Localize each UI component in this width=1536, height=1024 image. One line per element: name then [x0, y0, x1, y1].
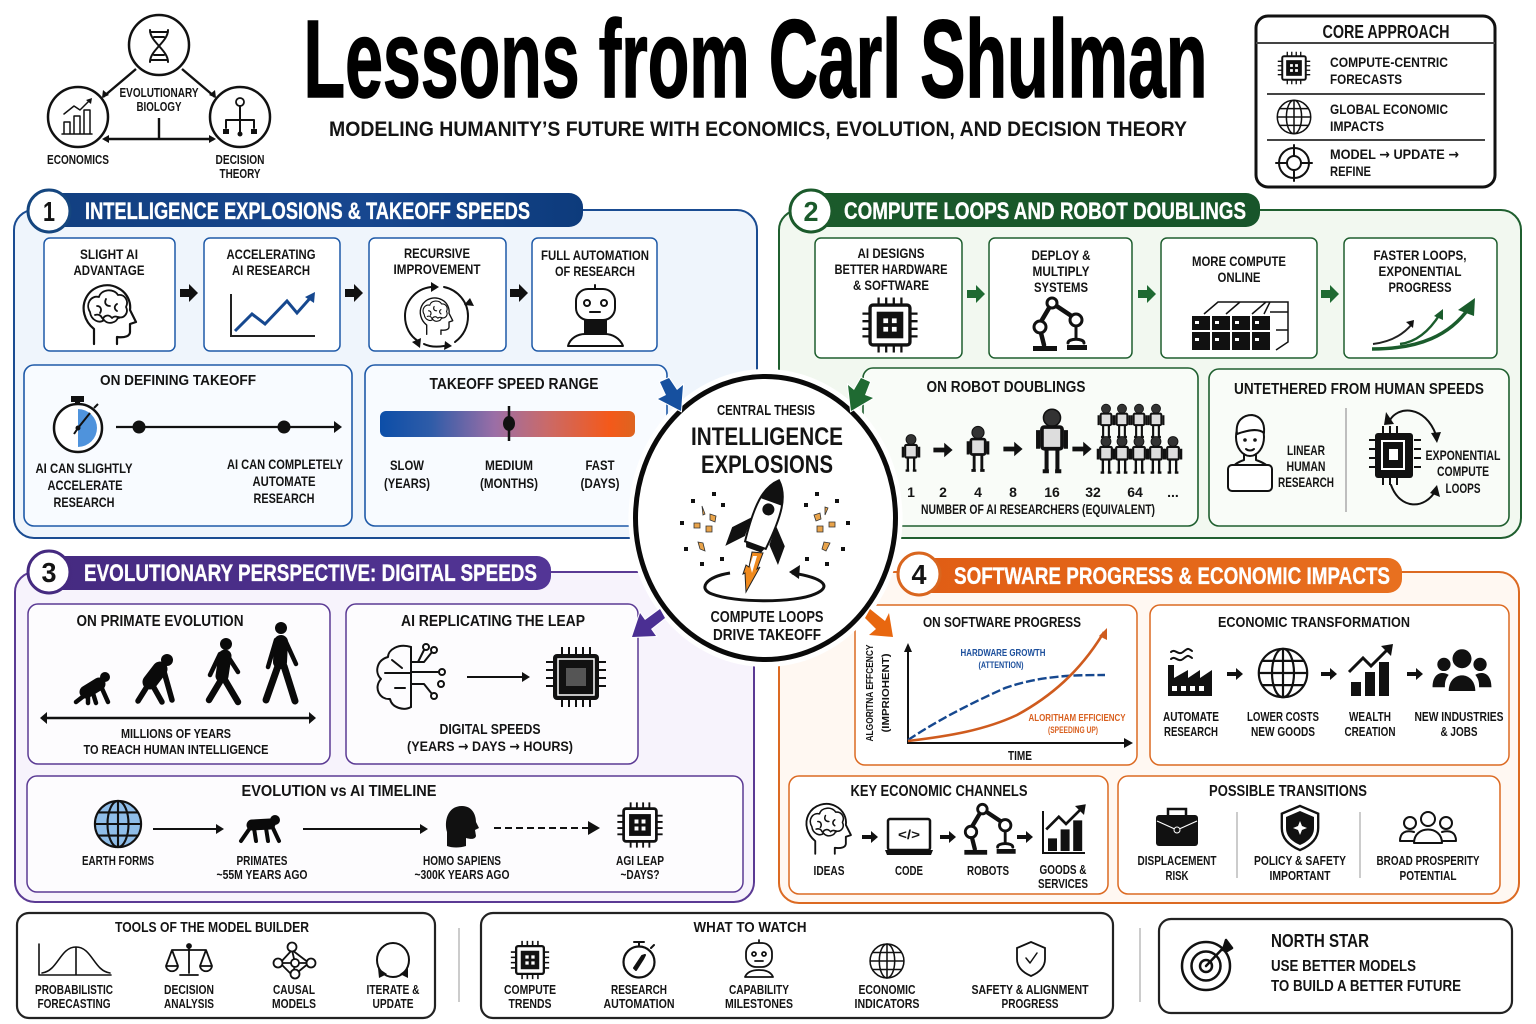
primate silhouettes	[76, 622, 296, 703]
label: new industries	[1414, 709, 1504, 739]
text: central thesis: CENTRAL THESIS	[717, 402, 815, 419]
panel: tools of the model builder	[17, 913, 435, 1018]
card: full automation of research: OF RESEARCH	[555, 263, 635, 279]
label: decision analysis: ANALYSIS	[164, 996, 214, 1011]
label: evolutionary biology	[120, 85, 199, 114]
icon: people	[1433, 649, 1491, 691]
gradient speed bar	[380, 406, 635, 441]
label: new industries: NEW INDUSTRIES	[1414, 709, 1504, 724]
text: compute-centric: COMPUTE-CENTRIC	[1330, 54, 1448, 70]
doubling numbers: ...	[1167, 484, 1179, 500]
icon: stopwatch	[624, 942, 654, 978]
center: central thesis circle	[628, 369, 902, 667]
panel: takeoff speed range	[365, 365, 667, 526]
panel: section 3 evolutionary perspective	[15, 551, 754, 902]
card: recursive improvement: RECURSIVE	[404, 245, 470, 261]
text: model update refine: MODEL → UPDATE →	[1330, 146, 1459, 163]
arrow	[1407, 668, 1423, 680]
label: probabilistic forecasting	[35, 982, 113, 1011]
label: displacement risk: DISPLACEMENT	[1138, 853, 1217, 868]
icon: orbit loop arrow	[705, 565, 824, 601]
icon: economics chart circle	[48, 87, 108, 147]
icon: scales	[166, 944, 212, 975]
text: compute-centric	[1330, 54, 1448, 87]
label: compute trends: TRENDS	[508, 996, 552, 1011]
panel: on software progress	[855, 605, 1137, 765]
text: digital speeds	[407, 721, 573, 755]
section 1 banner: 1	[43, 196, 55, 227]
label: policy and safety	[1254, 853, 1346, 883]
label: safety and alignment: PROGRESS	[1002, 996, 1059, 1011]
robots doubling	[903, 404, 1181, 473]
arrow	[1017, 831, 1033, 843]
text: AI can completely automate research	[227, 456, 344, 506]
doubling numbers: 8	[1009, 484, 1017, 500]
heading: AI REPLICATING THE LEAP	[401, 613, 585, 630]
text: AI can completely automate research: AUTOMATE	[252, 473, 316, 489]
doubling numbers: 1	[907, 484, 915, 500]
panel: north star	[1159, 919, 1512, 1013]
card: deploy and multiply	[989, 238, 1132, 358]
section 2 banner: COMPUTE LOOPS AND ROBOT DOUBLINGS	[844, 198, 1246, 225]
label: lower costs: NEW GOODS	[1251, 724, 1315, 739]
label: broad prosperity: POTENTIAL	[1400, 868, 1457, 883]
label: fast	[580, 457, 620, 491]
panel: on robot doublings	[863, 368, 1198, 526]
label: causal models: CAUSAL	[273, 982, 315, 997]
label: decision theory: DECISION	[216, 152, 264, 167]
heading: core approach: CORE APPROACH	[1322, 22, 1450, 42]
label: decision analysis: DECISION	[164, 982, 214, 997]
text: model update refine: REFINE	[1330, 163, 1371, 179]
timeline: takeoff	[116, 420, 342, 434]
card: slight AI advantage: SLIGHT AI	[80, 246, 138, 262]
label: research automation: AUTOMATION	[604, 996, 674, 1011]
label: displacement risk: RISK	[1166, 868, 1189, 883]
text: AI can slightly accelerate research: RESEARCH	[54, 494, 114, 510]
text: exponential compute loops	[1426, 447, 1501, 496]
section 3 banner: EVOLUTIONARY PERSPECTIVE: DIGITAL SPEEDS	[84, 560, 537, 587]
doubling numbers: 16	[1044, 484, 1060, 500]
icon: globe	[870, 944, 904, 978]
arrow	[180, 284, 198, 302]
text: better models: TO BUILD A BETTER FUTURE	[1271, 978, 1461, 995]
label: economic indicators: INDICATORS	[854, 996, 920, 1011]
text: intelligence explosions	[691, 423, 843, 479]
text: exponential compute loops: COMPUTE	[1437, 463, 1489, 479]
card: deploy and multiply: DEPLOY &	[1032, 247, 1090, 263]
label: lower costs: LOWER COSTS	[1247, 709, 1319, 724]
label: primates	[216, 853, 308, 882]
label: iterate and update	[366, 982, 420, 1011]
text: exponential compute loops: EXPONENTIAL	[1426, 447, 1501, 463]
label: slow: (YEARS)	[384, 475, 430, 491]
icon: briefcase	[1156, 809, 1198, 846]
label: goods and services: GOODS &	[1040, 862, 1086, 877]
card: faster loops: PROGRESS	[1388, 279, 1452, 295]
label: broad prosperity	[1376, 853, 1480, 883]
arrow	[153, 824, 224, 834]
arrow	[1321, 285, 1339, 303]
panel: section 1 intelligence explosions	[14, 190, 757, 538]
label: AGI leap: AGI LEAP	[616, 853, 664, 868]
icon: AGI chip	[617, 802, 663, 848]
card: recursive improvement	[369, 238, 506, 351]
label: lower costs	[1247, 709, 1319, 739]
label: probabilistic forecasting: PROBABILISTIC	[35, 982, 113, 997]
arrow	[345, 284, 363, 302]
text: AI can completely automate research: RESEARCH	[254, 490, 314, 506]
text: AI can completely automate research: AI CAN COMPLETELY	[227, 456, 344, 472]
heading: ECONOMIC TRANSFORMATION	[1218, 614, 1410, 631]
label: research automation	[604, 982, 674, 1011]
icon: primate	[241, 815, 280, 841]
arrow	[1138, 285, 1156, 303]
text: better models	[1271, 958, 1461, 995]
text: model update refine	[1330, 146, 1459, 179]
panel: on primate evolution	[28, 604, 330, 764]
icon: robot arm	[964, 804, 1016, 855]
label: homo sapiens: HOMO SAPIENS	[423, 853, 501, 868]
label: automate research: AUTOMATE	[1163, 709, 1219, 724]
label: safety and alignment: SAFETY & ALIGNMENT	[972, 982, 1089, 997]
heading: ON PRIMATE EVOLUTION	[76, 613, 244, 630]
label: capability milestones: CAPABILITY	[729, 982, 789, 997]
section 1 banner: INTELLIGENCE EXPLOSIONS & TAKEOFF SPEEDS	[85, 198, 530, 225]
axis label: NUMBER OF AI RESEARCHERS (EQUIVALENT)	[921, 501, 1155, 517]
label: safety and alignment	[972, 982, 1089, 1011]
panel: core approach	[1256, 16, 1495, 187]
text: compute-centric: FORECASTS	[1330, 71, 1402, 87]
arrow	[510, 284, 528, 302]
card: accelerating AI research: AI RESEARCH	[232, 262, 310, 278]
label: algorithm efficiency: (SPEEDING UP)	[1048, 725, 1098, 735]
card: AI designs better hardware: AI DESIGNS	[858, 245, 924, 261]
label: economics: ECONOMICS	[47, 152, 109, 167]
label: decision theory: THEORY	[220, 166, 261, 181]
panel: what to watch	[481, 913, 1113, 1018]
arrow	[940, 831, 956, 843]
card: faster loops	[1344, 238, 1497, 358]
icon: chip with loop arrows	[1369, 411, 1441, 504]
arrow: purple into center	[632, 609, 665, 637]
card: slight AI advantage: ADVANTAGE	[74, 262, 144, 278]
doubling numbers: 2	[939, 484, 947, 500]
label: wealth creation: WEALTH	[1349, 709, 1391, 724]
icon: target with arrow	[1182, 940, 1232, 990]
card: slight AI advantage	[44, 238, 175, 351]
label: research automation: RESEARCH	[611, 982, 667, 997]
rotated axis label: (IMPRIOHENT)	[880, 654, 892, 732]
doubling numbers: 64	[1127, 484, 1143, 500]
heading: ON DEFINING TAKEOFF	[100, 372, 256, 389]
section 3 banner	[28, 551, 551, 593]
label: AGI leap	[616, 853, 664, 882]
panel: possible transitions	[1118, 776, 1500, 894]
heading: north star: NORTH STAR	[1271, 931, 1369, 951]
text: intelligence explosions: INTELLIGENCE	[691, 423, 843, 451]
label: robots: ROBOTS	[967, 863, 1009, 878]
icon: chip	[1278, 52, 1310, 84]
label: ideas: IDEAS	[814, 863, 845, 878]
icon: brain circuit	[377, 644, 445, 709]
icon: stopwatch	[54, 396, 102, 452]
label: economic indicators	[854, 982, 920, 1011]
section 3 banner: 3	[42, 557, 56, 588]
header: discipline triad	[47, 15, 270, 181]
heading: KEY ECONOMIC CHANNELS	[850, 783, 1028, 800]
text: global economic impacts: GLOBAL ECONOMIC	[1330, 101, 1448, 117]
label: homo sapiens	[414, 853, 510, 882]
icon: laptop code	[885, 819, 933, 855]
heading: EVOLUTION vs AI TIMELINE	[242, 783, 437, 800]
text: AI can slightly accelerate research	[36, 460, 133, 510]
icon: laptop code: </>	[898, 827, 920, 842]
panel: section 4 software progress	[779, 553, 1519, 903]
card: faster loops: EXPONENTIAL	[1378, 263, 1462, 279]
label: time: TIME	[1008, 748, 1032, 763]
section 4 banner: 4	[912, 559, 927, 590]
arrow	[303, 824, 428, 834]
label: medium: MEDIUM	[485, 457, 533, 473]
label: automate research: RESEARCH	[1164, 724, 1218, 739]
text: compute loops drive takeoff: DRIVE TAKEOFF	[713, 627, 821, 644]
label: goods and services: SERVICES	[1038, 876, 1088, 891]
label: decision theory	[216, 152, 264, 181]
icon: bell curve	[39, 944, 111, 975]
heading: ON SOFTWARE PROGRESS	[923, 614, 1081, 631]
panel: evolution vs AI timeline	[27, 776, 743, 892]
text: AI can slightly accelerate research: AI CAN SLIGHTLY	[36, 460, 133, 476]
label: fast: FAST	[586, 457, 615, 473]
doubling numbers	[907, 484, 1179, 500]
card: faster loops: FASTER LOOPS,	[1374, 247, 1466, 263]
label: hardware growth: (ATTENTION)	[978, 660, 1024, 670]
text: compute loops drive takeoff	[710, 609, 824, 644]
label: evolutionary biology: EVOLUTIONARY	[120, 85, 199, 100]
card: AI designs better hardware: & SOFTWARE	[853, 277, 929, 293]
label: policy and safety: POLICY & SAFETY	[1254, 853, 1346, 868]
text: linear human research: RESEARCH	[1278, 474, 1334, 490]
icon: factory	[1168, 649, 1212, 696]
card: recursive improvement: IMPROVEMENT	[394, 261, 481, 277]
label: iterate and update: UPDATE	[372, 996, 414, 1011]
arrow	[967, 285, 985, 303]
icon: earth	[95, 801, 141, 847]
label: earth forms: EARTH FORMS	[82, 853, 154, 868]
icon: globe	[1277, 100, 1311, 134]
panel: AI replicating the leap	[346, 604, 638, 764]
label: policy and safety: IMPORTANT	[1270, 868, 1331, 883]
heading: ON ROBOT DOUBLINGS	[926, 379, 1086, 396]
label: primates: ~55M YEARS AGO	[216, 867, 308, 882]
icon: decision tree circle	[210, 87, 270, 147]
text: millions of years: TO REACH HUMAN INTELLIGENCE	[84, 742, 269, 757]
label: economic indicators: ECONOMIC	[858, 982, 916, 997]
label: displacement risk	[1138, 853, 1217, 883]
card: full automation of research: FULL AUTOMATION	[541, 247, 649, 263]
card: accelerating AI research	[204, 238, 340, 351]
card: accelerating AI research: ACCELERATING	[226, 246, 316, 262]
icon: causal graph	[274, 942, 316, 978]
label: causal models: MODELS	[272, 996, 316, 1011]
panel: economic transformation	[1150, 605, 1509, 765]
icon: black chip	[546, 647, 606, 707]
doubling numbers: 4	[974, 484, 982, 500]
label: evolutionary biology: BIOLOGY	[136, 99, 182, 114]
icon: safety shield	[1282, 806, 1318, 850]
label: wealth creation: CREATION	[1344, 724, 1396, 739]
section 2 banner	[790, 190, 1260, 232]
card: more compute online: ONLINE	[1218, 269, 1260, 285]
text: compute loops drive takeoff: COMPUTE LOOPS	[710, 609, 824, 626]
section 1 banner	[28, 190, 583, 232]
arrow	[467, 672, 530, 682]
panel: key economic channels	[789, 776, 1108, 894]
label: slow: SLOW	[390, 457, 425, 473]
icon: people outline	[1400, 812, 1456, 843]
icon: human head	[446, 806, 479, 848]
icon: human at laptop	[1228, 415, 1272, 491]
heading: WHAT TO WATCH	[694, 919, 806, 936]
label: broad prosperity: BROAD PROSPERITY	[1376, 853, 1480, 868]
label: hardware growth: HARDWARE GROWTH	[960, 647, 1046, 659]
panel: on defining takeoff	[24, 365, 352, 526]
label: compute trends	[504, 982, 556, 1011]
icon: robot head	[745, 940, 773, 977]
label: homo sapiens: ~300K YEARS AGO	[414, 867, 510, 882]
text: linear human research: HUMAN	[1286, 458, 1326, 474]
label: new industries: & JOBS	[1440, 724, 1478, 739]
label: automate research	[1163, 709, 1219, 739]
arrow: orange into center	[865, 609, 893, 637]
label: wealth creation	[1344, 709, 1396, 739]
card: AI designs better hardware	[815, 238, 962, 358]
rotated axis label	[864, 644, 892, 742]
card: full automation of research	[532, 238, 657, 351]
icon: goods chart	[1043, 804, 1086, 853]
label: AGI leap: ~DAYS?	[620, 867, 660, 882]
icon: idea head	[806, 804, 851, 854]
text: linear human research: LINEAR	[1287, 442, 1325, 458]
text: better models: USE BETTER MODELS	[1271, 958, 1416, 975]
label: compute trends: COMPUTE	[504, 982, 556, 997]
doubling numbers: 32	[1085, 484, 1101, 500]
dashed arrow	[494, 821, 600, 835]
line chart	[904, 628, 1133, 748]
icon: DNA in evolutionary biology circle	[129, 15, 189, 75]
label: capability milestones: MILESTONES	[725, 996, 793, 1011]
label: decision analysis	[164, 982, 214, 1011]
label: probabilistic forecasting: FORECASTING	[38, 996, 110, 1011]
icon: crosshair target	[1276, 145, 1312, 181]
subtitle: MODELING HUMANITY’S FUTURE WITH ECONOMICS, EVOLUTION, AND DECISION THEORY	[329, 118, 1187, 141]
heading: TOOLS OF THE MODEL BUILDER	[115, 919, 309, 936]
heading: TAKEOFF SPEED RANGE	[430, 376, 599, 393]
icon: chip	[511, 941, 549, 979]
arrow: blue into center	[658, 378, 683, 411]
label: algorithm efficiency	[1028, 712, 1126, 735]
text: exponential compute loops: LOOPS	[1446, 480, 1480, 496]
arrow	[1227, 668, 1243, 680]
section 2 banner: 2	[804, 196, 818, 227]
label: goods and services	[1038, 862, 1088, 891]
label: primates: PRIMATES	[236, 853, 288, 868]
text: global economic impacts	[1330, 101, 1448, 134]
text: global economic impacts: IMPACTS	[1330, 118, 1384, 134]
panel: untethered from human speeds	[1209, 369, 1509, 526]
arrow	[1321, 668, 1337, 680]
arrow: green into center	[848, 378, 873, 411]
arrow	[862, 831, 878, 843]
heading: POSSIBLE TRANSITIONS	[1209, 783, 1367, 800]
panel: section 2 compute loops	[779, 190, 1521, 538]
label: slow	[384, 457, 430, 491]
label: medium	[480, 457, 538, 491]
icon: iterate loop	[377, 943, 409, 978]
text: intelligence explosions: EXPLOSIONS	[701, 451, 833, 479]
label: code: CODE	[895, 863, 923, 878]
text: linear human research	[1278, 442, 1334, 490]
icon: shield check	[1017, 942, 1045, 976]
section 4 banner	[898, 553, 1402, 595]
icon: rocket	[725, 471, 805, 592]
label: iterate and update: ITERATE &	[366, 982, 420, 997]
text: millions of years	[84, 726, 269, 757]
label: capability milestones	[725, 982, 793, 1011]
label: medium: (MONTHS)	[480, 475, 538, 491]
rotated axis label: ALGORITNA EFFCENCY	[864, 644, 876, 742]
card: AI designs better hardware: BETTER HARDWARE	[834, 261, 948, 277]
icon: globe	[1259, 649, 1307, 697]
text: millions of years: MILLIONS OF YEARS	[121, 726, 231, 741]
card: more compute online	[1161, 238, 1317, 358]
label: causal models	[272, 982, 316, 1011]
label: fast: (DAYS)	[580, 475, 620, 491]
label: algorithm efficiency: ALORITHAM EFFICIENCY	[1028, 712, 1126, 724]
card: deploy and multiply: MULTIPLY	[1032, 263, 1090, 279]
card: deploy and multiply: SYSTEMS	[1034, 279, 1088, 295]
section 4 banner: SOFTWARE PROGRESS & ECONOMIC IMPACTS	[954, 563, 1390, 590]
text: AI can slightly accelerate research: ACCELERATE	[48, 477, 122, 493]
card: more compute online: MORE COMPUTE	[1192, 253, 1286, 269]
text: digital speeds: DIGITAL SPEEDS	[440, 721, 540, 738]
icon: debris particles	[680, 492, 850, 566]
label: hardware growth	[960, 647, 1046, 670]
icon: wealth chart	[1349, 644, 1393, 696]
text: digital speeds: (YEARS → DAYS → HOURS)	[407, 738, 573, 755]
double arrow: millions of years	[40, 712, 316, 724]
heading: UNTETHERED FROM HUMAN SPEEDS	[1234, 381, 1484, 398]
